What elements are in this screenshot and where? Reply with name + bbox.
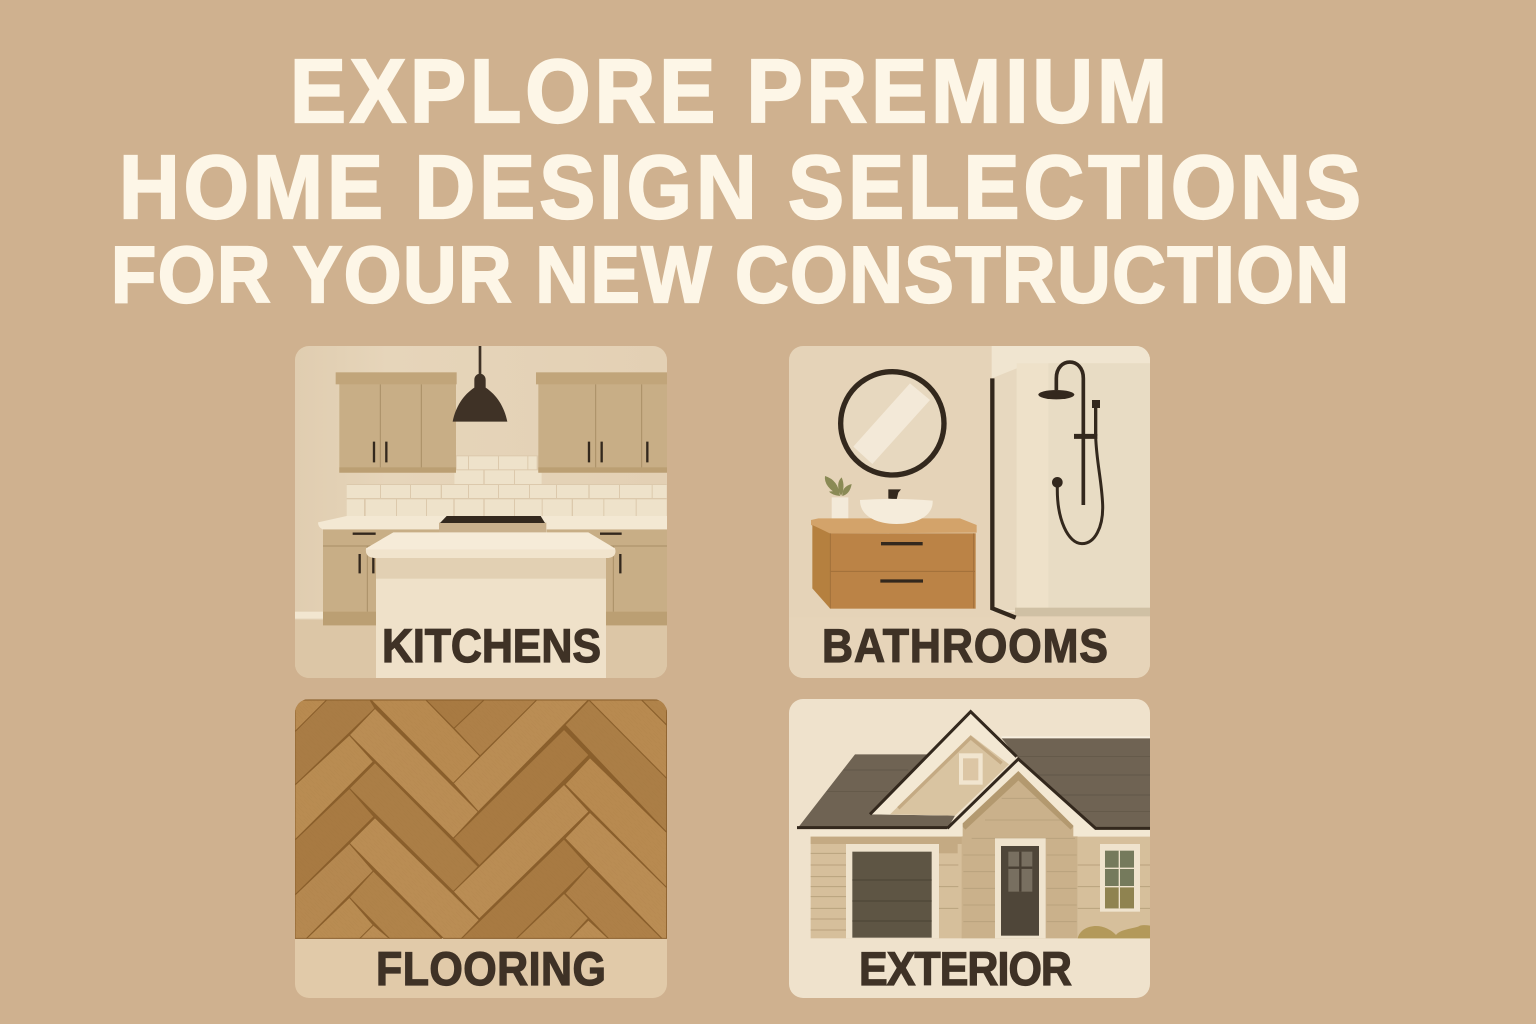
backsplash tiles — [347, 455, 667, 517]
cooktop — [440, 516, 545, 523]
roofs — [797, 736, 1155, 829]
label: bathrooms: BATHROOMS — [822, 619, 1108, 672]
label: flooring: FLOORING — [376, 942, 606, 995]
upper gable — [870, 712, 1017, 816]
panel: exterior — [789, 699, 1155, 998]
sink and faucet — [860, 489, 933, 524]
baseboard — [295, 612, 323, 619]
title: HOME DESIGN SELECTIONS — [119, 137, 1361, 238]
title — [111, 41, 1361, 320]
label: exterior: EXTERIOR — [859, 942, 1072, 995]
front door — [995, 838, 1046, 938]
shower enclosure — [992, 345, 1155, 616]
upper cabinet left — [336, 372, 457, 473]
lower cabinets — [323, 529, 675, 625]
garage door — [846, 844, 939, 938]
upper cabinet right — [536, 372, 675, 473]
mirror — [841, 372, 944, 475]
house illustration — [797, 712, 1155, 938]
label: kitchens: KITCHENS — [382, 619, 601, 672]
pendant lamp — [453, 345, 507, 422]
walls — [811, 775, 1155, 938]
herringbone wood floor — [295, 699, 667, 938]
plant — [825, 476, 852, 522]
title: EXPLORE PREMIUM — [290, 41, 1167, 142]
panel: kitchens — [290, 345, 675, 680]
shrubs — [1078, 925, 1155, 938]
side window — [1100, 844, 1140, 912]
front gable trim — [797, 759, 1155, 836]
shower fixture — [1038, 362, 1103, 544]
vanity — [811, 518, 977, 609]
shower glass frame — [992, 378, 1016, 618]
panel: bathrooms — [785, 345, 1155, 681]
panel: flooring — [295, 699, 667, 998]
island — [366, 532, 615, 680]
countertop — [318, 516, 675, 533]
title: FOR YOUR NEW CONSTRUCTION — [111, 230, 1349, 320]
infographic canvas — [114, 58, 1359, 998]
